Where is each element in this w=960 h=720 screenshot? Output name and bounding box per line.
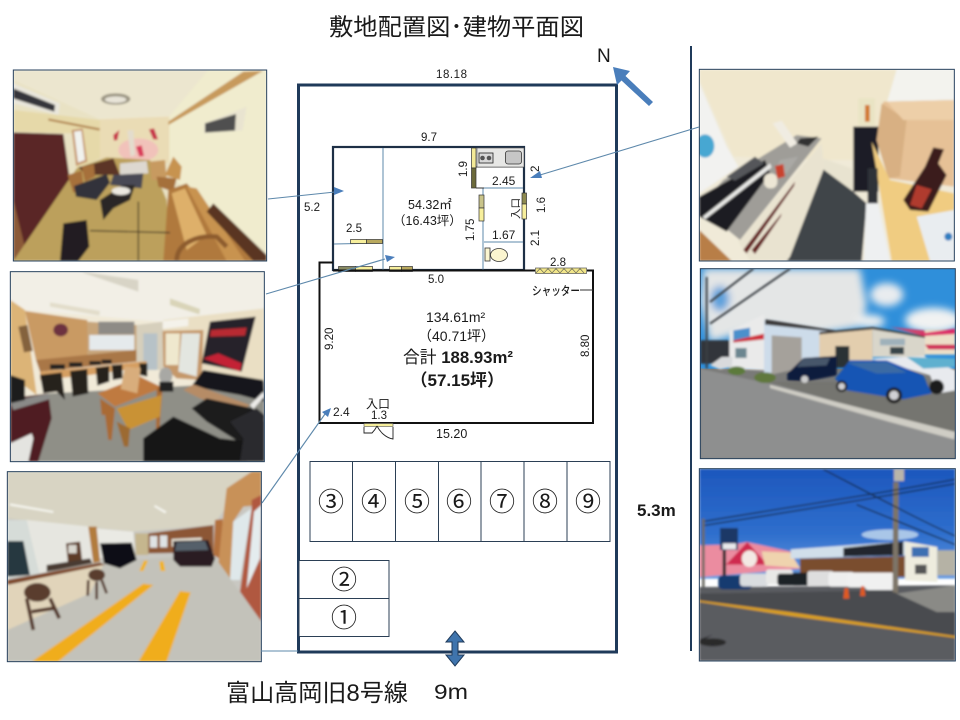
parking spaces 1 and 2: ② (331, 565, 357, 595)
photo: tatami room (13, 70, 267, 261)
lower building floor plan: （40.71坪） (418, 328, 495, 344)
photo: showroom interior (7, 472, 261, 662)
photo: street view (699, 469, 955, 661)
room labels and dimensions: 1.67 (492, 228, 516, 242)
lower building floor plan (320, 257, 593, 441)
parking spaces 3 to 9: ⑧ (532, 487, 558, 517)
icon: kitchen range and sink (477, 148, 524, 167)
room labels and dimensions: 9.7 (421, 132, 437, 144)
lower building floor plan: 入口 (366, 397, 390, 411)
parking spaces 1 and 2: ① (331, 603, 357, 633)
room labels and dimensions: 2.5 (346, 223, 362, 235)
room labels and dimensions: （16.43坪） (393, 214, 462, 228)
parking spaces 1 and 2 (299, 560, 389, 636)
area labels: 134.61m² (426, 309, 485, 325)
site boundary (298, 85, 616, 652)
room labels and dimensions (304, 132, 548, 286)
site width label: 18.18 (436, 69, 467, 81)
icon: toilet (485, 248, 508, 262)
parking spaces 3 to 9: ③ (318, 487, 344, 517)
pointer arrows from photos (261, 127, 699, 651)
road width label: 9m (434, 681, 468, 704)
windows and doors (338, 148, 526, 272)
lower building floor plan: 15.20 (436, 427, 467, 441)
room labels and dimensions: 54.32㎡ (408, 198, 452, 212)
room labels and dimensions: 1.6 (536, 197, 548, 213)
parking spaces 3 to 9: ⑤ (404, 487, 430, 517)
shutter: 2.8 (550, 257, 566, 269)
lower building floor plan: 8.80 (580, 335, 592, 357)
setback label: 5.3m (637, 501, 676, 520)
parking spaces 3 to 9: ⑥ (446, 487, 472, 517)
shutter: シャッター (532, 284, 580, 298)
parking spaces 3 to 9: ④ (361, 487, 387, 517)
parking spaces 3 to 9: ⑨ (575, 487, 601, 517)
divider line (690, 46, 692, 651)
road name label: 富山高岡旧8号線 (226, 680, 408, 707)
upper building floor plan (304, 132, 548, 286)
room labels and dimensions: 1.75 (465, 219, 477, 241)
title: 敷地配置図･建物平面図 (329, 14, 584, 40)
parking spaces 3 to 9 (310, 462, 610, 542)
lower building floor plan: 2.4 (333, 405, 350, 419)
icon: entrance door (364, 424, 393, 439)
room labels and dimensions: 1.9 (458, 161, 470, 177)
lower building floor plan: 1.3 (371, 410, 387, 422)
lower building floor plan: （57.15坪） (410, 371, 504, 390)
room labels and dimensions: 入口 (510, 198, 522, 219)
photo: kitchenette (696, 69, 954, 261)
photo: office lounge (10, 272, 264, 462)
dimensions: 9.20 (324, 328, 336, 350)
lower building floor plan: 合計 188.93m² (403, 348, 513, 367)
room labels and dimensions: 5.2 (304, 202, 320, 214)
room labels and dimensions: 2.1 (530, 230, 542, 246)
room labels and dimensions: 2 (530, 166, 542, 172)
room labels and dimensions: 2.45 (492, 174, 516, 188)
photo: building exterior (700, 269, 960, 459)
road access double arrow (446, 631, 464, 666)
north arrow: N (597, 46, 611, 67)
shutter (532, 257, 593, 298)
room labels and dimensions: 5.0 (428, 274, 444, 286)
north arrow (597, 46, 653, 106)
parking spaces 3 to 9: ⑦ (489, 487, 515, 517)
